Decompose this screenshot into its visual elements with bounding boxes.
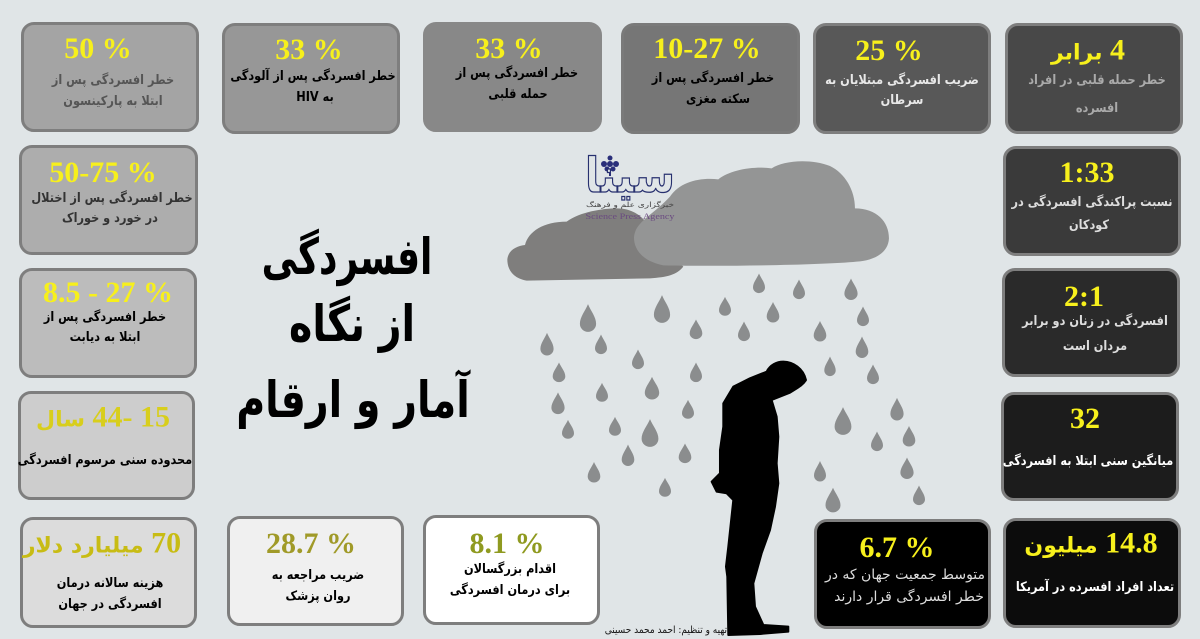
panel: psychiatrist 28.7%: روان پزشک — [285, 589, 351, 604]
panel: cancer 25%: 25 % — [855, 34, 923, 67]
panel: children 1:33: نسبت پراکندگی افسردگی در — [1011, 195, 1173, 210]
panel: HIV 33%: خطر افسردگی پس از آلودگی — [230, 69, 396, 84]
panel: stroke 10-27%: خطر افسردگی پس از — [652, 71, 774, 86]
panel: children 1:33: 1:33 — [1060, 156, 1114, 189]
panel: mean age 32: میانگین سنی ابتلا به افسردگی — [1003, 454, 1173, 469]
panel: age range 15-44: محدوده سنی مرسوم افسردگی — [18, 453, 192, 468]
panel: America 14.8 million: 14.8 میلیون — [1024, 526, 1158, 560]
panel: diabetes 8.5-27% — [19, 268, 197, 378]
panel: diabetes 8.5-27%: ابتلا به دیابت — [70, 330, 140, 345]
panel: diabetes 8.5-27%: خطر افسردگی پس از — [44, 310, 166, 325]
panel: mean age 32 — [1001, 392, 1179, 501]
panel: world 6.7%: متوسط جمعیت جهان که در — [825, 567, 985, 583]
panel: eating disorder 50-75%: در خورد و خوراک — [62, 211, 158, 226]
title: آمار و ارقام — [236, 371, 470, 429]
panel: America 14.8 million — [1003, 518, 1181, 628]
panel: world 6.7%: 6.7 % — [860, 531, 934, 564]
panel: stroke 10-27%: سکته مغزی — [686, 92, 750, 107]
panel: cancer 25%: ضریب افسردگی مبتلایان به — [825, 73, 979, 88]
panel: cost 70 billion — [20, 517, 197, 628]
panel: Parkinson 50%: ابتلا به پارکینسون — [63, 94, 163, 109]
panel: HIV 33%: 33 % — [275, 33, 343, 66]
panel: diabetes 8.5-27%: 8.5 - 27 % — [43, 276, 173, 309]
panel: Parkinson 50% — [21, 22, 199, 132]
panel: psychiatrist 28.7% — [227, 516, 404, 626]
credit: تهیه و تنظیم: احمد محمد حسینی — [605, 625, 727, 636]
panel: eating disorder 50-75%: 50-75 % — [49, 156, 157, 189]
panel: heart attack 33% — [423, 22, 602, 132]
panel: cancer 25%: سرطان — [881, 93, 923, 108]
panel: eating disorder 50-75%: خطر افسردگی پس از اختلال — [31, 191, 193, 206]
rain drops — [540, 273, 925, 512]
panel: stroke 10-27% — [621, 23, 800, 134]
icon: light cloud — [634, 161, 889, 266]
logo: Sina news agency — [585, 148, 675, 221]
panel: adults 8.1% — [423, 515, 600, 625]
panel: HIV 33%: به HIV — [296, 90, 334, 105]
panel: heart attack 4x: افسرده — [1076, 101, 1118, 116]
title — [236, 228, 471, 430]
panel: eating disorder 50-75% — [19, 145, 198, 255]
icon: dark cloud — [507, 208, 683, 281]
panel: women 2:1: مردان است — [1063, 339, 1127, 354]
panel: cost 70 billion: 70 میلیارد دلار — [23, 526, 181, 560]
logo: Sina news agency: سینا — [585, 148, 675, 204]
panel: psychiatrist 28.7%: ضریب مراجعه به — [272, 568, 364, 583]
panel: cancer 25% — [813, 23, 991, 134]
panel: heart attack 33%: 33 % — [475, 32, 543, 65]
panel: heart attack 4x — [1005, 23, 1183, 134]
panel: heart attack 4x: خطر حمله قلبی در افراد — [1028, 73, 1166, 88]
panel: heart attack 4x: 4 برابر — [1051, 34, 1125, 66]
panel: cost 70 billion: هزینه سالانه درمان — [57, 576, 163, 591]
panel: world 6.7% — [814, 519, 991, 629]
panel: Parkinson 50%: خطر افسردگی پس از — [52, 73, 174, 88]
panel: heart attack 33%: خطر افسردگی پس از — [456, 66, 578, 81]
logo: Sina news agency: Science Press Agency — [586, 211, 675, 221]
panel: age range 15-44: 15 -44 سال — [36, 400, 170, 434]
panel: world 6.7%: خطر افسردگی قرار دارند — [834, 589, 984, 605]
panel: children 1:33: کودکان — [1069, 218, 1109, 233]
logo: Sina news agency: خبرگزاری علم و فرهنگ — [586, 200, 674, 209]
panel: HIV 33% — [222, 23, 400, 134]
panel: adults 8.1%: 8.1 % — [470, 527, 544, 560]
panel: Parkinson 50%: 50 % — [64, 32, 132, 65]
panel: age range 15-44 — [18, 391, 195, 500]
title: افسردگی — [262, 228, 432, 286]
panel: psychiatrist 28.7%: 28.7 % — [266, 527, 356, 560]
panel: women 2:1 — [1002, 268, 1180, 377]
panel: stroke 10-27%: 10-27 % — [653, 32, 761, 65]
figure: man silhouette — [712, 362, 806, 635]
panel: heart attack 33%: حمله قلبی — [488, 87, 548, 102]
title: از نگاه — [289, 295, 415, 353]
panel: women 2:1: افسردگی در زنان دو برابر — [1022, 314, 1168, 329]
panel: adults 8.1%: برای درمان افسردگی — [450, 583, 570, 598]
panel: America 14.8 million: تعداد افراد افسرده در آمریکا — [1016, 580, 1174, 595]
icon: logo flower — [601, 156, 619, 176]
panel: adults 8.1%: اقدام بزرگسالان — [464, 562, 556, 577]
panel: cost 70 billion: افسردگی در جهان — [58, 597, 162, 612]
panel: women 2:1: 2:1 — [1064, 280, 1104, 313]
panel: children 1:33 — [1003, 146, 1181, 256]
panel: mean age 32: 32 — [1070, 402, 1100, 435]
